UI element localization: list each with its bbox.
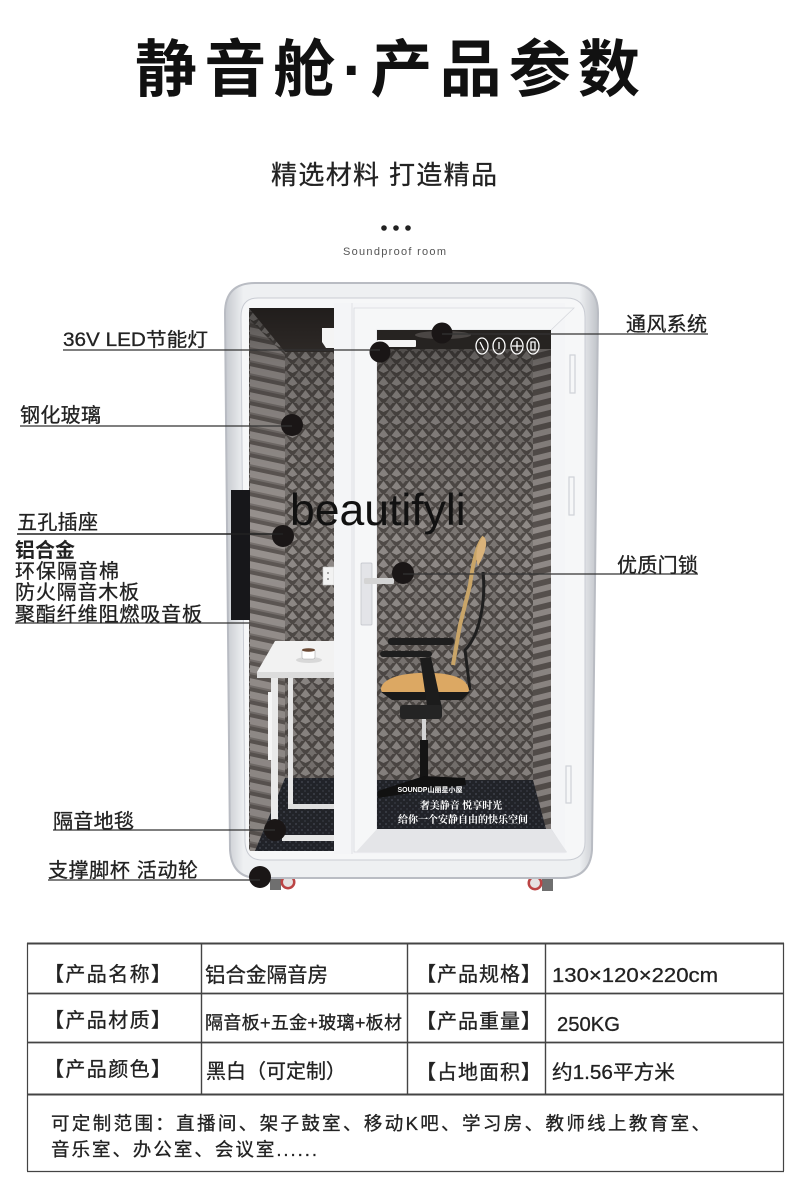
row: material and weight: 【产品重量】 — [416, 1010, 541, 1033]
door handle — [361, 563, 394, 625]
shading — [249, 308, 334, 851]
row: material and weight: 【产品材质】 — [44, 1009, 171, 1032]
soundproof booth illustration — [225, 283, 598, 891]
callout: casters — [48, 859, 271, 888]
ceiling — [249, 308, 334, 352]
door lamp — [377, 340, 416, 347]
table grid — [27, 943, 784, 1172]
title: 静音舱·产品参数 — [135, 36, 640, 105]
ceiling band — [377, 330, 551, 349]
row: colour and area: 黑白（可定制） — [206, 1060, 346, 1083]
door glass interior — [377, 330, 551, 829]
inner frame — [241, 298, 585, 860]
customisation note: 可定制范围：直播间、架子鼓室、移动K吧、学习房、教师线上教育室、 — [51, 1113, 710, 1134]
door shading — [377, 330, 551, 829]
callout: socket and materials: 聚酯纤维阻燃吸音板 — [15, 603, 202, 626]
callout: socket and materials: 防火隔音木板 — [15, 581, 139, 604]
row: colour and area: 【占地面积】 — [416, 1061, 541, 1084]
watermark: beautifyli — [290, 486, 466, 535]
door slogan: 给你一个安静自由的快乐空间 — [398, 811, 528, 826]
outer shell — [225, 283, 598, 878]
callout: door lock: 优质门锁 — [617, 554, 698, 577]
callout: socket and materials: 铝合金 — [15, 538, 75, 562]
left window interior — [249, 308, 334, 851]
row: colour and area: 约1.56平方米 — [552, 1061, 675, 1084]
callout: socket and materials: 环保隔音棉 — [15, 560, 119, 583]
english caption: Soundproof room — [343, 246, 446, 258]
door slogan: 奢美静音 悦享时光 — [420, 797, 502, 812]
row: colour and area — [44, 1058, 675, 1084]
row: name and size: 130×120×220cm — [552, 965, 718, 987]
door slogan — [398, 785, 528, 826]
callout: door lock — [392, 554, 698, 584]
right ribbed wall — [533, 345, 551, 829]
desk — [257, 641, 335, 841]
row: name and size: 【产品名称】 — [44, 963, 171, 986]
callout: LED lamp: 36V LED节能灯 — [63, 329, 208, 351]
door frame — [334, 303, 574, 854]
side black panel — [231, 490, 250, 620]
row: name and size: 【产品规格】 — [416, 963, 541, 986]
chair — [378, 537, 486, 798]
casters — [270, 872, 553, 891]
carpet door — [377, 780, 546, 829]
callout: ventilation: 通风系统 — [626, 313, 707, 336]
callout: carpet — [53, 810, 286, 841]
callout: socket and materials — [15, 511, 294, 626]
carpet left — [255, 778, 334, 851]
row: material and weight — [44, 1009, 620, 1036]
callout: tempered glass — [20, 404, 303, 436]
function icons — [476, 338, 539, 354]
callout: carpet: 隔音地毯 — [53, 810, 134, 833]
customisation note — [51, 1113, 710, 1160]
hinges — [566, 355, 575, 803]
ceiling lamp — [322, 328, 334, 348]
callout: socket and materials: 五孔插座 — [17, 511, 98, 534]
door slogan: SOUNDP山丽星小屋 — [398, 785, 462, 794]
coffee cup — [296, 648, 322, 663]
vent — [415, 331, 471, 339]
row: material and weight: 隔音板+五金+玻璃+板材 — [205, 1013, 402, 1033]
callout: ventilation — [432, 313, 708, 344]
callout: tempered glass: 钢化玻璃 — [20, 404, 101, 427]
row: name and size — [44, 963, 718, 987]
subtitle: 精选材料 打造精品 — [271, 160, 497, 190]
three dots ornament — [381, 225, 411, 231]
socket — [323, 567, 334, 585]
customisation note: 音乐室、办公室、会议室...... — [51, 1139, 317, 1160]
row: colour and area: 【产品颜色】 — [44, 1058, 171, 1081]
left ribbed wall — [250, 320, 285, 851]
specification table — [27, 943, 784, 1172]
callout: casters: 支撑脚杯 活动轮 — [48, 859, 198, 882]
callout: LED lamp — [63, 329, 390, 362]
row: material and weight: 250KG — [557, 1014, 620, 1036]
row: name and size: 铝合金隔音房 — [205, 964, 328, 987]
